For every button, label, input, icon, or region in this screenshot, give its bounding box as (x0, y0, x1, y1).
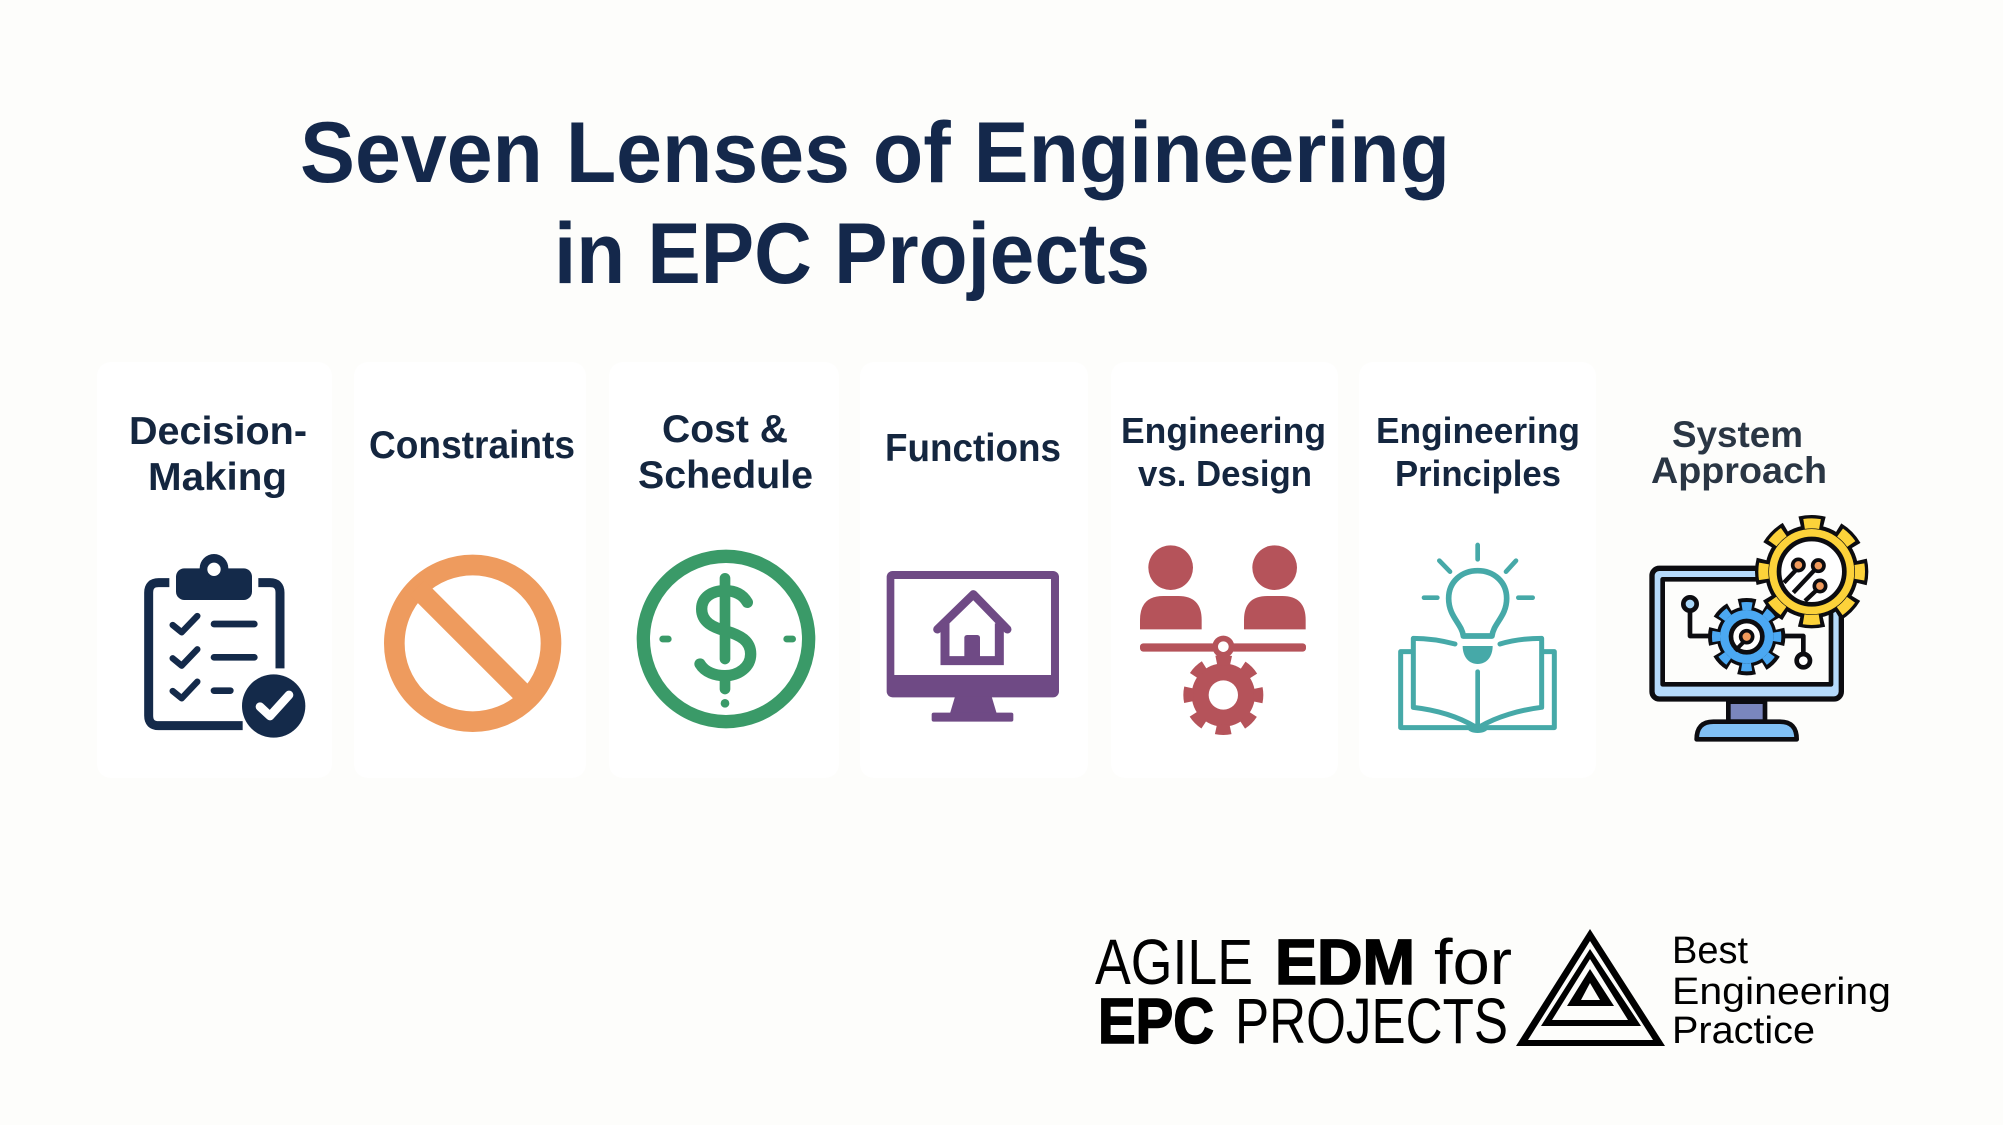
panel: Decision-Making (97, 362, 332, 778)
panel: Engineering vs. Design (1111, 362, 1338, 778)
logo: Agile EDM for EPC Projects: AGILE (1095, 926, 1253, 998)
panel: Functions (860, 362, 1088, 778)
panel: Cost & Schedule (609, 362, 839, 778)
icon: prohibition sign (394, 565, 551, 722)
logo: Agile EDM for EPC Projects: EDM (1275, 926, 1415, 998)
icon: monitor with house (887, 571, 1059, 722)
heading: Engineering vs. Design (1121, 410, 1326, 494)
heading: System Approach: System (1672, 414, 1803, 455)
heading: Constraints: Constraints (369, 424, 575, 467)
logo tagline: Best Engineering Practice: Best (1672, 930, 1748, 972)
logo: Agile EDM for EPC Projects: for (1434, 926, 1512, 998)
heading: Cost & Schedule (638, 408, 813, 497)
logo: Agile EDM for EPC Projects: PROJECTS (1235, 985, 1508, 1057)
heading: Cost & Schedule: Cost & (662, 408, 788, 451)
logo: Agile EDM for EPC Projects (1095, 926, 1512, 1057)
logo tagline: Best Engineering Practice: Practice (1672, 1010, 1815, 1052)
logo tagline: Best Engineering Practice: Engineering (1672, 971, 1891, 1013)
heading: Engineering Principles (1376, 410, 1580, 494)
title: in EPC Projects (554, 206, 1150, 302)
icon: light bulb over open book (1401, 545, 1554, 733)
heading: Functions: Functions (885, 427, 1061, 470)
title (300, 105, 1450, 302)
logo tagline: Best Engineering Practice (1672, 930, 1891, 1052)
heading: Engineering vs. Design: Engineering (1121, 410, 1326, 451)
logo: Agile EDM for EPC Projects: EPC (1098, 985, 1214, 1057)
heading: Decision-Making (129, 410, 307, 499)
icon: dollar coin (643, 556, 809, 722)
icon: two people balanced on a gear (1140, 545, 1306, 730)
heading: Engineering vs. Design: vs. Design (1138, 453, 1312, 494)
heading: System Approach (1651, 414, 1827, 491)
panel: System Approach (1651, 414, 1861, 739)
icon: clipboard with checklist (149, 554, 305, 738)
title: Seven Lenses of Engineering (300, 105, 1450, 201)
heading: Decision-Making: Decision- (129, 410, 307, 453)
icon: monitor with gears and circuit (1652, 522, 1861, 739)
heading: System Approach: Approach (1651, 450, 1827, 491)
heading: Engineering Principles: Principles (1395, 453, 1561, 494)
logo: concentric triangles (1516, 929, 1665, 1046)
panel: Constraints (354, 362, 586, 778)
heading: Cost & Schedule: Schedule (638, 454, 813, 497)
heading: Engineering Principles: Engineering (1376, 410, 1580, 451)
panel: Engineering Principles (1359, 362, 1596, 778)
heading: Decision-Making: Making (148, 456, 287, 499)
